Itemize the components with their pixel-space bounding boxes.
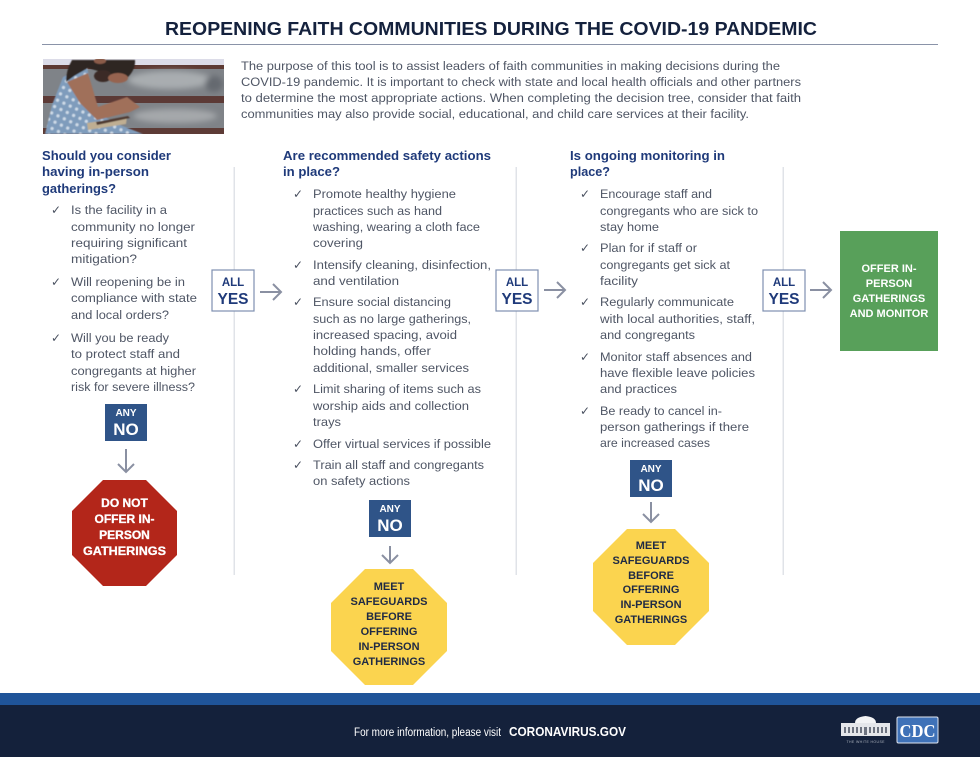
checklist: column 1: and local orders?	[71, 308, 169, 322]
checklist: column 1: compliance with state	[71, 291, 197, 305]
any no badge 2	[369, 500, 411, 537]
checklist: column 2: ✓	[293, 187, 303, 201]
checklist: column 2: Offer virtual services if possible	[313, 437, 491, 451]
arrow down 2	[382, 546, 398, 563]
photo: girl praying	[43, 58, 224, 134]
checklist: column 2: washing, wearing a cloth face	[312, 220, 480, 234]
checklist: column 1: Will you be ready	[71, 331, 170, 345]
checklist: column 1: Is the facility in a	[71, 203, 167, 217]
checklist: column 3: ✓	[580, 295, 590, 309]
all yes badge 3: YES	[768, 291, 800, 308]
checklist: column 1: ✓	[51, 275, 61, 289]
checklist: column 3: and congregants	[600, 328, 695, 342]
stop sign: meet safeguards 1: BEFORE	[366, 611, 412, 623]
stop sign: do not offer: GATHERINGS	[83, 544, 166, 558]
all yes badge 3	[763, 270, 805, 311]
intro text	[241, 59, 801, 121]
stop sign: meet safeguards 2: MEET	[636, 540, 667, 552]
checklist: column 3: congregants get sick at	[600, 258, 731, 272]
checklist: column 2: Promote healthy hygiene	[313, 187, 456, 201]
all yes badge 2: ALL	[506, 277, 528, 289]
stop sign: meet safeguards 1: SAFEGUARDS	[350, 596, 428, 608]
heading: column 3: Is ongoing monitoring in	[570, 149, 725, 163]
outcome box: offer in-person gatherings: AND MONITOR	[850, 308, 928, 320]
heading: column 3: place?	[570, 165, 610, 179]
checklist: column 1: to protect staff and	[71, 347, 180, 361]
checklist: column 2: trays	[313, 415, 341, 429]
checklist: column 2: ✓	[293, 382, 303, 396]
arrow down 3	[643, 502, 659, 522]
checklist: column 2: practices such as hand	[313, 204, 442, 218]
any no badge 3: ANY	[640, 464, 662, 475]
checklist: column 3: Encourage staff and	[600, 187, 712, 201]
outcome box: offer in-person gatherings: OFFER IN-	[862, 263, 917, 275]
icon: white house logo	[841, 716, 890, 744]
checklist: column 2: covering	[313, 236, 363, 250]
all yes badge 3: ALL	[773, 277, 795, 289]
arrow right 3	[810, 282, 831, 298]
checklist: column 2: ✓	[293, 258, 303, 272]
checklist: column 3: facility	[600, 274, 639, 288]
outcome box: offer in-person gatherings	[840, 231, 938, 351]
stop sign: meet safeguards 1: IN-PERSON	[358, 641, 420, 653]
checklist: column 1: ✓	[51, 203, 61, 217]
any no badge 1	[105, 404, 147, 441]
checklist: column 3: ✓	[580, 187, 590, 201]
stop sign: meet safeguards 2: OFFERING	[623, 584, 679, 596]
checklist: column 2: and ventilation	[313, 274, 399, 288]
any no badge 1: NO	[113, 420, 139, 439]
stop sign: meet safeguards 2: BEFORE	[628, 570, 674, 582]
icon: white house logo: THE WHITE HOUSE	[846, 740, 885, 744]
checklist: column 2: additional, smaller services	[313, 361, 469, 375]
stop sign: do not offer: OFFER IN-	[94, 512, 154, 526]
footer text: CORONAVIRUS.GOV	[509, 725, 627, 739]
stop sign: meet safeguards 2: IN-PERSON	[620, 599, 682, 611]
outcome box: offer in-person gatherings: GATHERINGS	[853, 293, 925, 305]
heading: column 1	[42, 149, 171, 196]
checklist: column 3: ✓	[580, 350, 590, 364]
checklist: column 1: ✓	[51, 331, 61, 345]
checklist: column 2: Train all staff and congregants	[313, 458, 484, 472]
checklist: column 2: increased spacing, avoid	[313, 328, 457, 342]
checklist: column 3: Plan for if staff or	[600, 241, 697, 255]
any no badge 1: ANY	[115, 408, 137, 419]
checklist: column 3: have flexible leave policies	[600, 366, 755, 380]
icon: CDC logo: CDC	[900, 721, 936, 741]
footer text: For more information, please visit	[354, 727, 502, 739]
checklist: column 3: congregants who are sick to	[600, 204, 758, 218]
arrow down 1	[118, 449, 134, 472]
intro text: COVID-19 pandemic. It is important to check with state and local health officials and other partners	[241, 75, 801, 89]
checklist: column 2: ✓	[293, 458, 303, 472]
intro text: to determine the most appropriate actions. When completing the decision tree, consider that faith	[241, 91, 801, 105]
heading: column 2: Are recommended safety actions	[283, 149, 491, 163]
checklist: column 3: Regularly communicate	[600, 295, 734, 309]
outcome box: offer in-person gatherings: PERSON	[866, 278, 912, 290]
checklist: column 1: requiring significant	[71, 236, 188, 250]
stop sign: meet safeguards 1: GATHERINGS	[353, 656, 425, 668]
stop sign: meet safeguards 2: GATHERINGS	[615, 614, 687, 626]
intro text: communities may also provide social, educational, and child care services at their facility.	[241, 107, 749, 121]
heading: column 3	[570, 149, 725, 179]
stop sign: meet safeguards 2: SAFEGUARDS	[612, 555, 690, 567]
checklist: column 3: Be ready to cancel in-	[600, 404, 722, 418]
all yes badge 1	[212, 270, 254, 311]
heading: column 1: gatherings?	[42, 182, 116, 196]
footer text	[354, 725, 627, 739]
checklist: column 3: person gatherings if there	[600, 420, 749, 434]
all yes badge 2: YES	[501, 291, 533, 308]
any no badge 2: NO	[377, 516, 403, 535]
checklist: column 2: such as no large gatherings,	[313, 312, 471, 326]
arrow right 2	[544, 282, 565, 298]
all yes badge 1: YES	[217, 291, 249, 308]
checklist: column 2: Limit sharing of items such as	[313, 382, 481, 396]
heading: column 2	[283, 149, 491, 179]
checklist: column 3: are increased cases	[600, 436, 710, 450]
checklist: column 2: on safety actions	[313, 474, 410, 488]
arrow right 1	[260, 284, 281, 300]
checklist: column 1	[51, 203, 197, 394]
footer	[0, 693, 980, 757]
title: REOPENING FAITH COMMUNITIES DURING THE COVID-19 PANDEMIC	[165, 18, 817, 39]
stop sign: meet safeguards 1: MEET	[374, 581, 405, 593]
stop sign: meet safeguards 2	[593, 529, 709, 645]
checklist: column 1: mitigation?	[71, 252, 137, 266]
checklist: column 3: ✓	[580, 241, 590, 255]
checklist: column 3: stay home	[600, 220, 659, 234]
all yes badge 2	[496, 270, 538, 311]
heading: column 1: Should you consider	[42, 149, 171, 163]
any no badge 2: ANY	[379, 504, 401, 515]
checklist: column 2: worship aids and collection	[312, 399, 469, 413]
checklist: column 3: with local authorities, staff,	[599, 312, 755, 326]
stop sign: do not offer	[72, 480, 177, 586]
checklist: column 2	[293, 187, 491, 488]
checklist: column 3: ✓	[580, 404, 590, 418]
stop sign: do not offer: PERSON	[99, 528, 150, 542]
any no badge 3	[630, 460, 672, 497]
stop sign: do not offer: DO NOT	[101, 496, 148, 510]
checklist: column 2: ✓	[293, 437, 303, 451]
intro text: The purpose of this tool is to assist leaders of faith communities in making decisions during the	[241, 59, 780, 73]
stop sign: meet safeguards 1: OFFERING	[361, 626, 417, 638]
stop sign: meet safeguards 1	[331, 569, 447, 685]
checklist: column 3: and practices	[600, 382, 677, 396]
heading: column 1: having in-person	[42, 165, 149, 179]
checklist: column 1: risk for severe illness?	[71, 380, 195, 394]
any no badge 3: NO	[638, 476, 664, 495]
checklist: column 3	[580, 187, 758, 450]
checklist: column 1: congregants at higher	[71, 364, 196, 378]
checklist: column 1: Will reopening be in	[71, 275, 185, 289]
checklist: column 2: Intensify cleaning, disinfection,	[313, 258, 491, 272]
checklist: column 2: ✓	[293, 295, 303, 309]
checklist: column 2: Ensure social distancing	[313, 295, 451, 309]
heading: column 2: in place?	[283, 165, 340, 179]
checklist: column 2: holding hands, offer	[313, 344, 431, 358]
all yes badge 1: ALL	[222, 277, 244, 289]
checklist: column 3: Monitor staff absences and	[600, 350, 752, 364]
checklist: column 1: community no longer	[71, 220, 195, 234]
